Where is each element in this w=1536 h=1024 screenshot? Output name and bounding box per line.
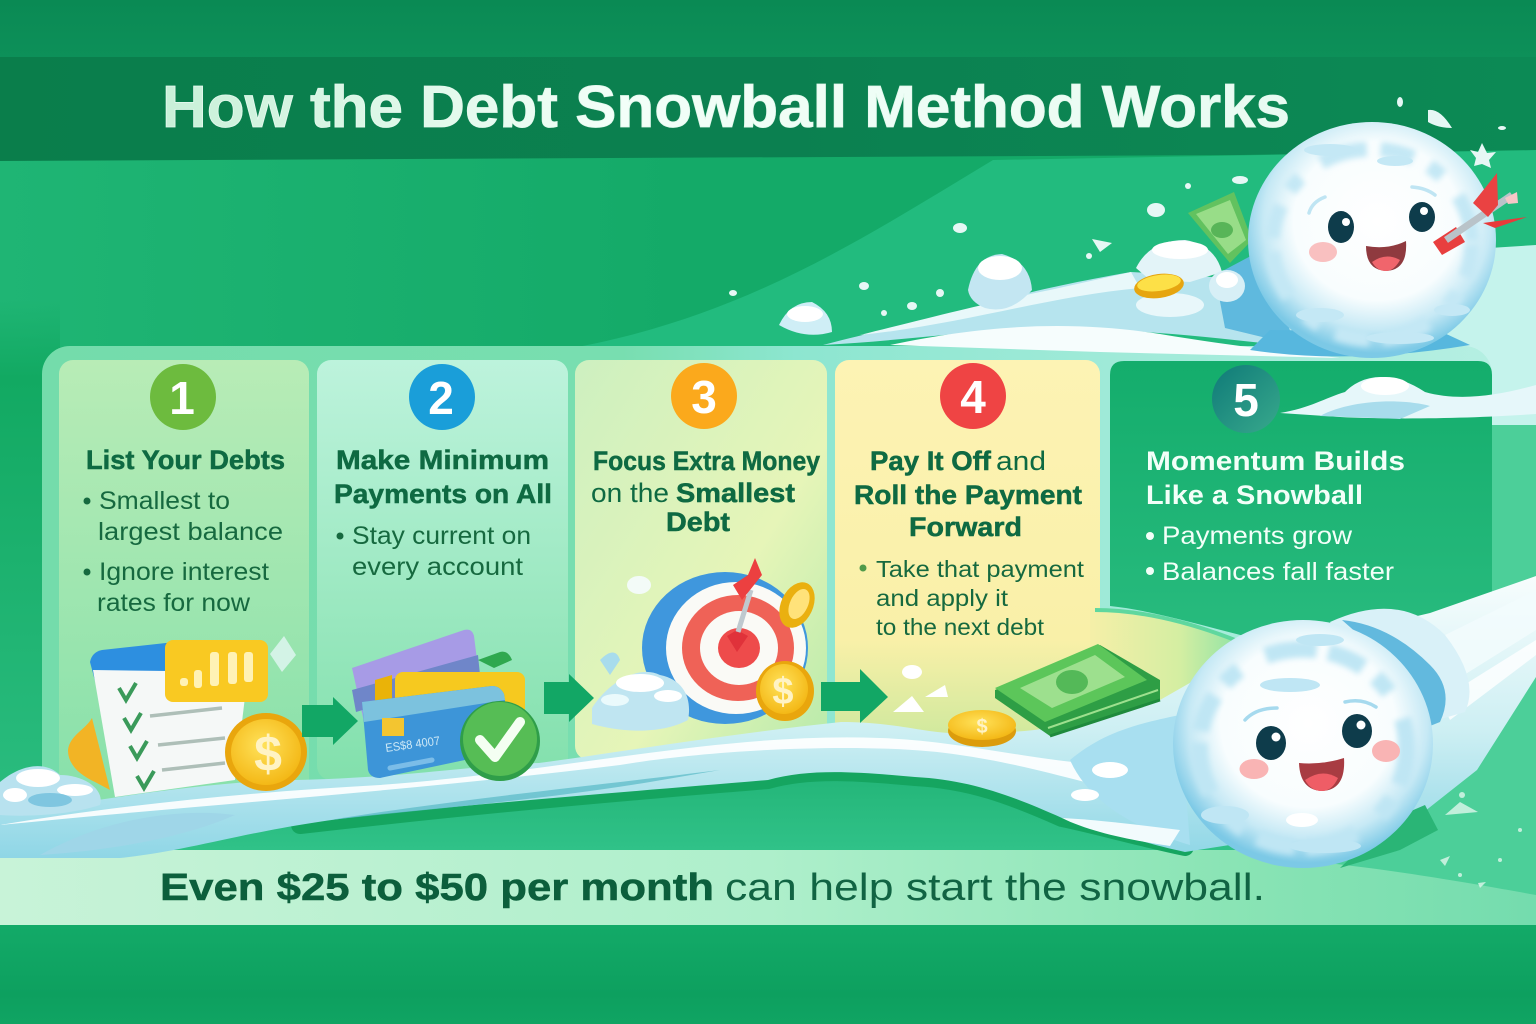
green-yellow swoosh between steps 4 and 5: [1090, 610, 1240, 725]
heading: focus extra money: Debt: [666, 507, 730, 537]
panel: step 5: [1110, 361, 1492, 640]
heading: focus extra money: Smallest: [676, 478, 795, 508]
snow mound left: [0, 766, 101, 816]
bullet: take that payment: Take that payment: [876, 556, 1085, 582]
panel: step 2: [317, 360, 568, 780]
badge: 5: 5: [1233, 374, 1259, 426]
snowball: lump behind lower character: [1330, 609, 1470, 732]
heading: list your debts: List Your Debts: [86, 445, 285, 475]
icon: cash stack and coin: [893, 644, 1160, 747]
face: [1240, 701, 1400, 791]
heading: momentum builds: Like a Snowball: [1146, 480, 1363, 510]
badge: 4: [940, 363, 1006, 429]
bottom message: [160, 867, 1265, 909]
bullet: stay current: [336, 522, 531, 581]
badge: 1: 1: [169, 372, 195, 424]
bullets: list your debts: Ignore interest: [99, 558, 269, 586]
bullets: momentum: Payments grow: [1162, 522, 1353, 550]
icon: small coin: [1133, 271, 1185, 301]
panel: step 3: [575, 360, 827, 760]
lower snow stream: [0, 576, 1536, 858]
heading: make minimum payments: Payments on All: [334, 479, 552, 509]
badge: 2: 2: [428, 372, 454, 424]
stream shadow: [300, 772, 1185, 847]
heading: momentum builds: [1146, 446, 1405, 510]
title: How the Debt Snowball Method Works: [162, 74, 1290, 140]
arrow 3: [821, 669, 888, 723]
icon: checklist with coin: [68, 636, 307, 797]
panel: step 1: [59, 360, 309, 810]
heading: pay it off: Roll the Payment: [854, 480, 1082, 510]
bullets: momentum: Balances fall faster: [1162, 558, 1394, 586]
bullets: list your debts: Smallest to: [99, 487, 230, 515]
green area beneath the stream: [0, 750, 1300, 850]
snow mound at target: [592, 652, 689, 731]
heading: focus extra money: [591, 446, 820, 537]
panel: steps container: [42, 346, 1492, 826]
badge: 4: 4: [960, 371, 986, 423]
arrow 2: [544, 674, 594, 722]
heading: pay it off: Forward: [909, 512, 1022, 542]
bullet: take that payment: to the next debt: [876, 614, 1045, 640]
heading: momentum builds: Momentum Builds: [1146, 446, 1405, 476]
bullets: list your debts: [84, 487, 283, 617]
bullet: stay current: Stay current on: [352, 522, 531, 550]
upper snow stream: [823, 250, 1340, 358]
badge: 3: [671, 363, 737, 429]
icon: target with dart and coins: [627, 558, 822, 724]
ball shadow and speckles: [1340, 792, 1522, 888]
heading: make minimum payments: [334, 445, 552, 509]
icon: dart: [1433, 173, 1527, 255]
badge: 3: 3: [691, 371, 717, 423]
heading: pay it off: [854, 446, 1082, 542]
top snow lumps: [779, 240, 1245, 335]
panel: step 4: [835, 360, 1100, 760]
top header stripe: [0, 0, 1536, 58]
light band behind bottom message: [0, 850, 1536, 925]
heading: make minimum payments: Make Minimum: [336, 445, 549, 475]
background: margins: [0, 245, 1536, 860]
arrow 1: [302, 697, 358, 745]
bullet: stay current: every account: [352, 553, 523, 581]
icon: cash bill: [1188, 192, 1252, 263]
icon: credit cards with check: ES$8 4007: [384, 733, 441, 755]
icon: credit cards with check: [352, 630, 540, 781]
snowball: top character: [1248, 122, 1496, 358]
bullet: take that payment: [860, 556, 1085, 640]
icon: star and flakes: [729, 97, 1506, 316]
heading: focus extra money: Focus Extra Money: [593, 446, 820, 476]
icon: checklist with coin: $: [254, 726, 282, 782]
bullet: take that payment: and apply it: [876, 585, 1009, 611]
badge: 5: [1212, 365, 1280, 433]
icon: target with dart and coins: $: [772, 671, 794, 713]
face: [1309, 187, 1435, 271]
bottom green base: [0, 925, 1536, 1024]
heading: pay it off: and: [996, 446, 1046, 476]
field beside lower right: [1280, 720, 1536, 895]
icon: cash stack and coin: $: [976, 716, 988, 738]
snowball: lower character: [1173, 620, 1433, 868]
background: field swoosh: [560, 150, 1536, 350]
heading: pay it off: Pay It Off: [870, 446, 992, 476]
bullets: momentum: [1146, 522, 1394, 586]
snow drift across step 5: [1280, 377, 1536, 419]
bottom message: Even $25 to $50 per month: [160, 867, 714, 909]
bottom message: can help start the snowball.: [725, 867, 1265, 909]
title band: [0, 57, 1536, 161]
bullets: list your debts: rates for now: [97, 589, 251, 617]
bullets: list your debts: largest balance: [98, 518, 283, 546]
badge: 1: [150, 364, 216, 430]
badge: 2: [409, 364, 475, 430]
heading: focus extra money: on the: [591, 478, 669, 508]
